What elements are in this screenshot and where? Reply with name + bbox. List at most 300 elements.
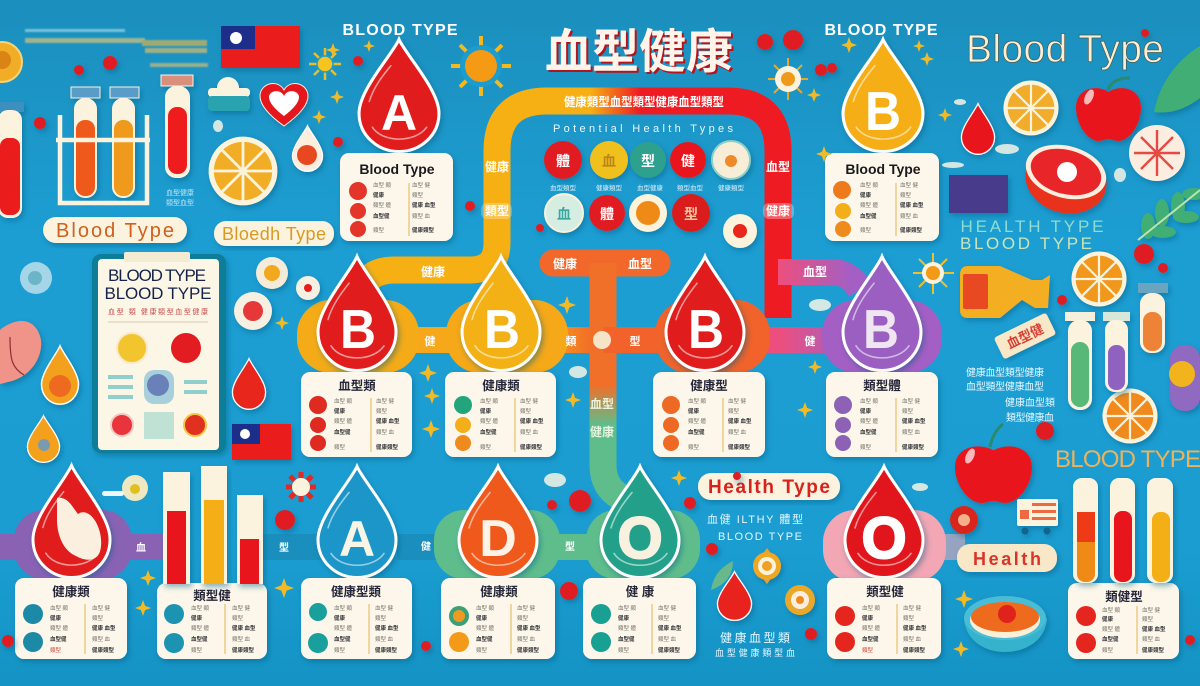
card text: 類型 體 [688,417,707,425]
card text: 類型 血 [375,635,394,643]
panel: red B card [301,372,412,457]
card text: 類型 [191,646,203,654]
card text: 類型 [1102,646,1114,654]
card icons [23,604,43,652]
tubes: right cluster [1065,283,1200,411]
icon: lung [0,321,41,384]
tube: red bar [163,472,190,584]
card text [191,604,256,654]
pipe: orange right band [603,327,680,353]
card text: 血型 類 [334,604,353,612]
clipboard organ [144,370,174,404]
icon: small drop right [961,104,995,154]
row one captions [550,183,744,192]
drop: B red right: B [688,298,724,360]
card text [373,181,436,236]
pipe: orange branch [553,250,657,276]
icon: bowl [964,596,1047,652]
label: blood type orange: BLOOD TYPE [1055,446,1200,473]
title: 血型健康 [545,25,733,78]
label: health type blood type: BLOOD TYPE [960,234,1092,253]
row one captions: 健康類型 [596,183,622,192]
card text: 類型 血 [517,635,536,643]
card text: 血型 類 [191,604,210,612]
card text: 類型 血 [92,635,111,643]
text block: caption bottom centre: 健康血型類 [720,630,790,645]
card title: Blood Type [359,161,435,177]
pill: health type [698,473,840,500]
card text: 類型 [376,407,388,415]
card text: 健康類型 [1142,646,1165,654]
blob: green O [586,510,700,579]
tube: orange [71,87,100,198]
text block: white caption right [966,366,1055,424]
tube: red [161,75,193,178]
drop: B purple: B [863,298,899,360]
clipboard clip [124,252,190,262]
card text: 血型 類 [50,604,69,612]
icon: rack and tubes [0,75,193,218]
panel: blue A card [301,578,412,659]
card text: 血型 健 [232,604,251,612]
card text: 血型 類 [862,604,881,612]
icon: sun purple side [913,253,954,294]
card text: 類型 [232,614,244,622]
label: health type blood type: HEALTH TYPE [960,217,1104,236]
card text [334,604,399,654]
tube: gold bar [201,466,227,584]
panel: tubes right card [1068,583,1179,659]
icon: starburst bottom [286,472,316,502]
card text [862,604,927,654]
card text: 類型 體 [862,624,881,632]
drop: O red: O [861,506,907,571]
card title: 類型體 [863,378,901,393]
icon: purple screen [949,175,1008,213]
pipe labels: 血 [136,541,146,554]
card icons [833,181,851,237]
pipe: pink band lower [765,327,840,353]
card text: 健康類型 [412,226,435,234]
blob: orange [655,300,770,373]
card text: 健康 [688,407,700,415]
card text: 類型 體 [860,201,879,209]
card text [334,397,400,452]
card text: 血型 健 [900,181,919,189]
text block: caption bottom centre [715,630,795,658]
icon: tag: 血型健 [1004,321,1046,352]
card text: 健康類型 [658,646,681,654]
card text: 健康 血型 [376,417,400,425]
card text: 類型 [860,443,872,451]
pipe labels: 型 [630,335,640,348]
text block: caption bottom centre: 血型健康類型血 [715,647,795,658]
icon: row one circles [544,141,750,179]
icon: sun left [309,48,341,80]
card text: 類型 [900,191,912,199]
text block: white caption right: 健康血型類 [1005,396,1055,409]
drop: A blue: A [339,511,375,567]
panel: type B card [825,153,939,241]
card text: 類型 體 [334,417,353,425]
pill: blood type: Blood Type [56,220,174,242]
card text: 類型 體 [860,417,879,425]
card text: 血型健 [480,428,497,436]
card text [860,397,926,452]
icon: row one labels [556,153,695,169]
tubes: bottom left chart [163,466,263,584]
card text: 類型 體 [334,624,353,632]
card title: 健康類 [482,378,520,393]
card text: 健康類型 [902,443,925,451]
decorative icons: gold stars [135,37,973,657]
card text: 血型 類 [334,397,353,405]
card text: 健康 [334,407,346,415]
drop: O green: O [617,506,663,571]
card text: 血型健 [334,428,351,436]
card text: 血型健 [618,635,635,643]
card text: 健康 血型 [728,417,752,425]
icon: anatomical heart [57,498,101,560]
pipe labels: 健 [421,540,431,553]
card text: 類型 體 [480,417,499,425]
icon: gold drop lower [27,416,60,462]
card text: 類型 [520,407,532,415]
card text: 類型 體 [373,201,392,209]
card text: 血型 類 [1102,606,1121,614]
icon: cloud box [208,77,250,111]
card text: 類型 [412,191,424,199]
icon: apple bottom [955,424,1032,503]
pipe labels: 血型 [803,264,827,279]
icon: tag [994,313,1056,359]
arch side pale tags [481,203,512,219]
pill: health type: Health Type [708,477,830,498]
card text [1102,606,1166,654]
card text: 健康 血型 [903,624,927,632]
blob: gold middle [446,300,568,373]
pipe labels: 血型 [590,396,614,411]
card text: 健康 血型 [902,417,926,425]
card text: 健康 [480,407,492,415]
card text: 血型健 [373,212,390,220]
pipe labels: 健康 [553,256,577,271]
drop: B gold [462,257,540,370]
card text: 類型 血 [1142,635,1161,643]
icon: orange drop [41,346,79,404]
icon: yellow bottle [960,266,1050,318]
card text: 健康 [860,407,872,415]
pipe: gold and orange row band [410,327,603,353]
card icons [834,396,852,451]
icon: small note text: 類型血型 [166,198,194,207]
arch caption: 健康類型血型類型健康血型類型 [564,94,724,109]
icon: row two labels: 血 [557,206,571,222]
card text: 血型 健 [1142,606,1161,614]
card icons [308,603,328,653]
row one captions: 類型血型 [677,183,704,192]
card text [50,604,116,654]
panel: type A card [340,153,453,241]
icon: faded notes [25,29,208,67]
card text: 類型 血 [520,428,539,436]
card text: 血型健 [334,635,351,643]
drop: D orange: D [479,510,517,568]
icon: flag top [221,26,300,68]
card text: 健康類型 [92,646,115,654]
pipe: blue band [262,534,445,560]
title: 血型健康 [547,27,735,80]
drop backing blobs [14,300,946,582]
pipe labels: 血型 [628,256,652,271]
card icons [454,396,472,451]
card text: 血型健 [50,635,67,643]
card title: 類型健 [866,584,904,599]
card title: Blood Type [845,161,921,177]
blob: purple left [14,510,132,579]
pill: health [957,544,1057,572]
card title: 類型健 [193,588,231,603]
drop: B gold: B [484,298,520,360]
panel: red O card [827,578,941,659]
pipe labels: 健 [804,334,816,348]
icon: grey note text: 血型健康 [166,188,194,197]
icon: red drop [232,359,266,409]
card text: 血型健 [688,428,705,436]
card title: 類健型 [1105,589,1143,604]
icon: teardrop lower centre [711,561,752,620]
pipe labels: 型 [565,540,575,553]
pipe: gold to red arch [360,101,778,318]
clipboard caption: 血型 類 健康類型血型健康 [108,307,208,316]
icon: row one labels: 健 [681,153,695,169]
arch side labels: 健康 [485,159,509,174]
blob: purple [822,300,942,373]
tube: red short bar [237,495,263,584]
icon: heart [260,83,308,126]
icon: egg sun lower [753,548,815,615]
text block: healthy blood type: 血健 ILTHY 體型 [707,512,803,526]
icon: sun right [768,58,808,100]
icon: row two circles [545,194,757,248]
card text: 類型 [50,646,62,654]
card text: 血型 類 [618,604,637,612]
card text: 健康 [862,614,874,622]
card text [480,397,544,452]
card text: 類型 [480,443,492,451]
card text: 血型 類 [860,181,879,189]
drop: A red top [359,39,439,152]
card text: 血型 健 [375,604,394,612]
card text: 健康類型 [728,443,751,451]
card text: 類型 血 [902,428,921,436]
icon: citrus left [209,137,277,205]
drop: B red [318,257,396,370]
card text: 類型 [375,614,387,622]
card icons [591,604,611,652]
card text: 類型 血 [376,428,395,436]
card text: 類型 血 [232,635,251,643]
tube: amber [110,87,139,198]
heading: blood type left: BLOOD TYPE [342,22,458,39]
card text: 血型 健 [412,181,431,189]
card text: 類型 血 [412,212,431,220]
icon: row two labels: 型 [684,206,698,222]
card text: 類型 體 [1102,625,1121,633]
card text: 健康 血型 [232,624,256,632]
icon: small red drop [292,126,323,171]
card text: 血型 健 [903,604,922,612]
row one captions: 血型類型 [550,183,576,192]
card text: 血型 類 [860,397,879,405]
card text [476,604,541,654]
pipe labels: 健 [424,334,436,348]
drop: A blue [318,466,396,578]
icon: row one labels: 體 [556,153,570,169]
card text: 健康 血型 [1142,625,1166,633]
icon: citrus coin [0,42,22,82]
icon: sun centre [451,36,511,96]
panel: orange B card [653,372,765,457]
card text: 健康類型 [520,443,543,451]
drop: heart [33,465,110,578]
pipe labels: 健康 [590,424,614,439]
card text: 類型 [902,407,914,415]
card text: 類型 [903,614,915,622]
blob: pink [823,510,946,582]
icon: citrus by tubes [1071,251,1127,307]
drop: O red [845,466,923,578]
clipboard title [104,266,212,303]
card text: 類型 [862,646,874,654]
icon: truck [1017,499,1058,534]
card text: 健康類型 [375,646,398,654]
subtitle: potential health types: Potential Health Types [553,123,734,135]
decorative icons: pale clouds [213,99,1126,491]
card title: 健 康 [626,584,655,599]
pipe: orange to green trunk [603,263,640,503]
icon: row two labels: 體 [600,206,614,222]
card text: 健康類型 [903,646,926,654]
card text: 健康 [334,614,346,622]
pipe labels: 健康 [766,203,790,218]
card text: 健康類型 [232,646,255,654]
card text: 健康 [373,191,385,199]
card icons [449,606,469,652]
card text: 血型健 [860,428,877,436]
drop: O green [601,466,679,578]
card text: 血型 健 [520,397,539,405]
drop: B purple [843,257,921,370]
tube: left partial [0,102,24,218]
card title: 血型類 [338,378,376,393]
card text: 血型 類 [480,397,499,405]
flow connector pipes [0,101,965,547]
card text: 類型 血 [728,428,747,436]
card text: 類型 體 [618,624,637,632]
card text: 血型 健 [728,397,747,405]
card text: 健康類型 [900,226,923,234]
card text: 類型 [658,614,670,622]
text block: healthy blood type: BLOOD TYPE [718,531,802,543]
card text: 血型 健 [376,397,395,405]
drop: A red top: A [381,85,417,141]
icon: target badges [234,257,320,330]
card text: 健康 [860,191,872,199]
card icons [164,604,184,653]
text block: white caption right: 健康血型類型健康 [966,366,1044,379]
icon: row one labels: 型 [641,153,655,169]
card text: 類型 [92,614,104,622]
card text: 健康 血型 [412,201,436,209]
icon: row one labels: 血 [602,153,616,169]
panel: green O card [583,578,696,659]
drop: B gold top: B [865,80,901,142]
card text: 類型 [728,407,740,415]
card text [618,604,682,654]
panel: tubes card [157,583,267,659]
icon: red gauge [950,506,978,534]
card icons [835,606,855,652]
card text: 血型健 [191,635,208,643]
card icons [349,182,367,237]
card text: 健康 血型 [658,624,682,632]
tube: purple [1103,312,1130,392]
card text: 血型 類 [476,604,495,612]
card title: 健康類 [52,584,90,599]
card text: 血型 類 [373,181,392,189]
card text: 健康類型 [517,646,540,654]
clipboard title: BLOOD TYPE [104,284,212,303]
card text: 血型健 [1102,635,1119,643]
icon: citrus lower [1102,388,1158,444]
card title: 健康類 [480,584,518,599]
card text: 血型 類 [688,397,707,405]
tubes: bottom right chart [1073,478,1173,583]
drop: B red: B [340,298,376,360]
clipboard title: BLOOD TYPE [108,266,206,285]
drop: B gold top [843,39,923,152]
panel: purple B card [826,372,938,457]
icon: row two labels [557,206,698,222]
tube: orange fill [1073,478,1098,583]
drop: D orange [459,466,537,578]
icon: flag lower [232,424,291,460]
card text: 類型 [1142,615,1154,623]
tube: orange small [1138,283,1168,353]
card icons [309,396,327,451]
panel: gold B card [445,372,556,457]
panel: clipboard [92,252,226,453]
card text: 類型 體 [476,624,495,632]
card text: 健康 [1102,615,1114,623]
card text: 血型健 [860,212,877,220]
card icons [1076,606,1096,653]
icon: flower gear [20,262,52,294]
card text: 類型 [373,226,385,234]
card text: 健康 [50,614,62,622]
card text: 類型 血 [900,212,919,220]
card title: 健康型類 [331,584,381,599]
clipboard lower icons [111,414,133,436]
band labels: 健康 [421,264,445,279]
card text: 類型 血 [658,635,677,643]
card text: 類型 [517,614,529,622]
tube: round flask [1169,345,1200,411]
icon: grapefruit half [1018,136,1114,222]
pipe: pink band upper [778,272,860,290]
panel: heart card [15,578,127,659]
